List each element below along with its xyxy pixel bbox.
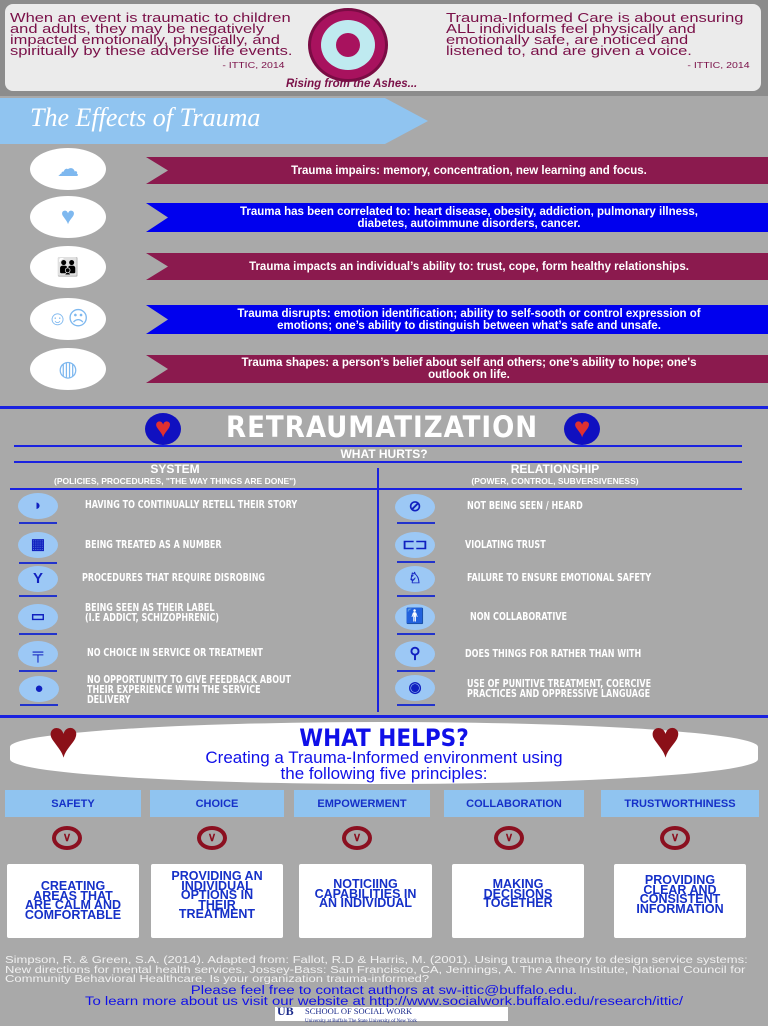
relationship list: USE OF PUNITIVE TREATMENT, COERCIVE bbox=[467, 678, 651, 690]
text: PROVIDING AN bbox=[171, 869, 263, 883]
text: University at Buffalo The State University of New York bbox=[305, 1019, 417, 1024]
quote left bbox=[10, 11, 292, 70]
icon: masks: ☺☹ bbox=[47, 308, 89, 330]
system list: ● bbox=[34, 680, 44, 697]
icon: people: 👪 bbox=[57, 257, 79, 277]
system list: ▭ bbox=[31, 608, 45, 625]
text: ∨ bbox=[353, 830, 361, 844]
relationship list: FAILURE TO ENSURE EMOTIONAL SAFETY bbox=[467, 572, 651, 584]
system list: HAVING TO CONTINUALLY RETELL THEIR STORY bbox=[85, 499, 297, 511]
system list: NO CHOICE IN SERVICE OR TREATMENT bbox=[87, 647, 263, 659]
banner 2: diabetes, autoimmune disorders, cancer. bbox=[357, 218, 581, 230]
text: NOTICIING bbox=[333, 877, 398, 891]
text: PROVIDING bbox=[645, 873, 715, 887]
column heads: (POLICIES, PROCEDURES, "THE WAY THINGS ARE DONE") bbox=[54, 476, 296, 486]
quote left: and adults, they may be negatively bbox=[10, 22, 264, 36]
top band background bbox=[0, 0, 768, 96]
effect rows bbox=[30, 148, 106, 390]
retraumatization heading bbox=[145, 410, 600, 445]
text: CHOICE bbox=[196, 798, 238, 810]
relationship list: ⊏⊐ bbox=[402, 536, 428, 553]
system list: ◗ bbox=[33, 497, 43, 514]
citation bbox=[5, 955, 748, 985]
what helps cloud: the following five principles: bbox=[281, 764, 487, 783]
text: TOGETHER bbox=[483, 896, 553, 910]
text: OPTIONS IN bbox=[181, 888, 253, 902]
logo: school of social work: UB bbox=[277, 1004, 294, 1018]
quote right bbox=[446, 11, 750, 70]
system list: BEING TREATED AS A NUMBER bbox=[85, 539, 222, 551]
header panel bbox=[5, 4, 761, 91]
text: INFORMATION bbox=[636, 902, 724, 916]
quote right: emotionally safe, are noticed and bbox=[446, 33, 688, 47]
icon: masks bbox=[30, 298, 106, 340]
text: CLEAR AND bbox=[643, 882, 717, 896]
quote right: Trauma-Informed Care is about ensuring bbox=[446, 11, 743, 25]
principle descriptions: AREAS THAT bbox=[33, 888, 113, 902]
chevrons bbox=[52, 826, 82, 850]
relationship list: VIOLATING TRUST bbox=[465, 539, 546, 551]
relationship list: ⊘ bbox=[409, 498, 421, 515]
banner 4: emotions; one’s ability to distinguish between what’s safe and unsafe. bbox=[277, 320, 661, 332]
quote left: impacted emotionally, physically, and bbox=[10, 33, 280, 47]
what helps cloud: Creating a Trauma-Informed environment using bbox=[205, 748, 563, 767]
relationship list: 🚹 bbox=[406, 608, 424, 625]
text: ∨ bbox=[671, 830, 679, 844]
contact bbox=[85, 985, 683, 1008]
text: ∨ bbox=[208, 830, 216, 844]
relationship list: NOT BEING SEEN / HEARD bbox=[467, 500, 583, 512]
icon: heart bbox=[30, 196, 106, 238]
quote left: spiritually by these adverse life events. bbox=[10, 44, 292, 58]
text: CONSISTENT bbox=[640, 892, 720, 906]
relationship list: NON COLLABORATIVE bbox=[470, 611, 567, 623]
quote right: ALL individuals feel physically and bbox=[446, 22, 696, 36]
banner 3: Trauma impacts an individual’s ability to: trust, cope, form healthy relationships. bbox=[249, 260, 689, 272]
relationship list bbox=[395, 494, 652, 706]
icon: globe: ◍ bbox=[58, 356, 78, 381]
quote right: listened to, and are given a voice. bbox=[446, 44, 692, 58]
text: CAPABILITIES IN bbox=[315, 886, 416, 900]
system list: ╤ bbox=[33, 645, 43, 662]
banner 2: Trauma has been correlated to: heart disease, obesity, addiction, pulmonary illness, bbox=[240, 206, 698, 218]
banner 5 bbox=[146, 355, 768, 383]
icon: broken heart left: ♥ bbox=[155, 412, 171, 443]
icon: brain bbox=[30, 148, 106, 190]
system list: THEIR EXPERIENCE WITH THE SERVICE bbox=[87, 684, 261, 696]
relationship list: ♘ bbox=[408, 570, 422, 587]
principle descriptions bbox=[7, 864, 139, 938]
text: THEIR bbox=[198, 898, 236, 912]
text: ∨ bbox=[505, 830, 513, 844]
what helps cloud: WHAT HELPS? bbox=[299, 724, 469, 752]
icon: broken heart left bbox=[145, 413, 181, 445]
chevrons: ∨ bbox=[63, 830, 71, 844]
logo bbox=[308, 8, 388, 82]
quote left: When an event is traumatic to children bbox=[10, 11, 291, 25]
banner 1: Trauma impairs: memory, concentration, new learning and focus. bbox=[291, 164, 647, 176]
principle descriptions: CREATING bbox=[41, 879, 105, 893]
banner 2 bbox=[146, 203, 768, 232]
text: AN INDIVIDUAL bbox=[319, 896, 412, 910]
system list: (I.E ADDICT, SCHIZOPHRENIC) bbox=[85, 612, 219, 624]
text: RELATIONSHIP bbox=[511, 462, 599, 476]
what hurts: WHAT HURTS? bbox=[340, 447, 428, 461]
system list: NO OPPORTUNITY TO GIVE FEEDBACK ABOUT bbox=[87, 674, 291, 686]
system list: PROCEDURES THAT REQUIRE DISROBING bbox=[82, 572, 265, 584]
banner 5: Trauma shapes: a person’s belief about self and others; one’s ability to hope; one's bbox=[242, 357, 696, 369]
principle labels bbox=[5, 790, 141, 817]
retraumatization heading: RETRAUMATIZATION bbox=[226, 410, 538, 444]
banner 4 bbox=[146, 305, 768, 334]
contact: Please feel free to contact authors at sw-ittic@buffalo.edu. bbox=[191, 985, 577, 997]
icon: bandaged heart right: ♥ bbox=[650, 711, 681, 769]
icon: broken heart right bbox=[564, 413, 600, 445]
principle descriptions: COMFORTABLE bbox=[25, 908, 121, 922]
column heads bbox=[54, 462, 296, 486]
icon: people bbox=[30, 246, 106, 288]
icon: globe bbox=[30, 348, 106, 390]
citation: New directions for mental health services. Jossey-Bass: San Francisco, CA, Jennings, A. The Anna Institute, National Council for bbox=[5, 964, 745, 976]
banner 3 bbox=[146, 253, 768, 280]
icon: heart: ♥ bbox=[61, 203, 75, 230]
icon: bandaged heart left: ♥ bbox=[48, 711, 79, 769]
text: EMPOWERMENT bbox=[317, 798, 407, 810]
title banner: effects: The Effects of Trauma bbox=[30, 103, 260, 132]
relationship list: PRACTICES AND OPPRESSIVE LANGUAGE bbox=[467, 688, 650, 700]
logo: school of social work: SCHOOL OF SOCIAL WORK bbox=[305, 1006, 412, 1016]
text: INDIVIDUAL bbox=[181, 878, 253, 892]
principle labels: SAFETY bbox=[51, 798, 95, 810]
text: MAKING bbox=[493, 877, 543, 891]
quote left: - ITTIC, 2014 bbox=[222, 61, 285, 70]
system list: Y bbox=[33, 570, 43, 587]
text: TRUSTWORTHINESS bbox=[624, 798, 736, 810]
system list: BEING SEEN AS THEIR LABEL bbox=[85, 602, 214, 614]
text: TREATMENT bbox=[179, 907, 255, 921]
system list: DELIVERY bbox=[87, 694, 130, 706]
relationship list: DOES THINGS FOR RATHER THAN WITH bbox=[465, 648, 641, 660]
logo: school of social work bbox=[275, 1007, 508, 1021]
banner 5: outlook on life. bbox=[428, 369, 510, 381]
icon: broken heart right: ♥ bbox=[574, 412, 590, 443]
relationship list: ⚲ bbox=[410, 645, 420, 662]
banner 4: Trauma disrupts: emotion identification; ability to self-sooth or control expression of bbox=[237, 308, 701, 320]
principle descriptions: ARE CALM AND bbox=[25, 898, 121, 912]
title banner: effects bbox=[0, 98, 428, 144]
quote right: - ITTIC, 2014 bbox=[687, 61, 750, 70]
text: (POWER, CONTROL, SUBVERSIVENESS) bbox=[471, 476, 639, 486]
icon: brain: ☁ bbox=[57, 156, 79, 181]
column heads: SYSTEM bbox=[150, 462, 200, 476]
tagline: Rising from the Ashes... bbox=[286, 78, 417, 90]
contact: To learn more about us visit our website at http://www.socialwork.buffalo.edu/research/ittic/ bbox=[85, 996, 683, 1008]
relationship list: ◉ bbox=[408, 679, 422, 696]
system list bbox=[18, 493, 298, 706]
citation: Simpson, R. & Green, S.A. (2014). Adapted from: Fallot, R.D & Harris, M. (2001). Using trauma theory to design service systems: bbox=[5, 955, 748, 966]
text: DECISIONS bbox=[484, 886, 552, 900]
what helps cloud bbox=[10, 722, 758, 784]
text: COLLABORATION bbox=[466, 798, 562, 810]
banner 1 bbox=[146, 157, 768, 184]
system list: ▦ bbox=[31, 536, 45, 553]
citation: Community Behavioral Healthcare. Is your organization trauma-informed? bbox=[5, 974, 429, 985]
